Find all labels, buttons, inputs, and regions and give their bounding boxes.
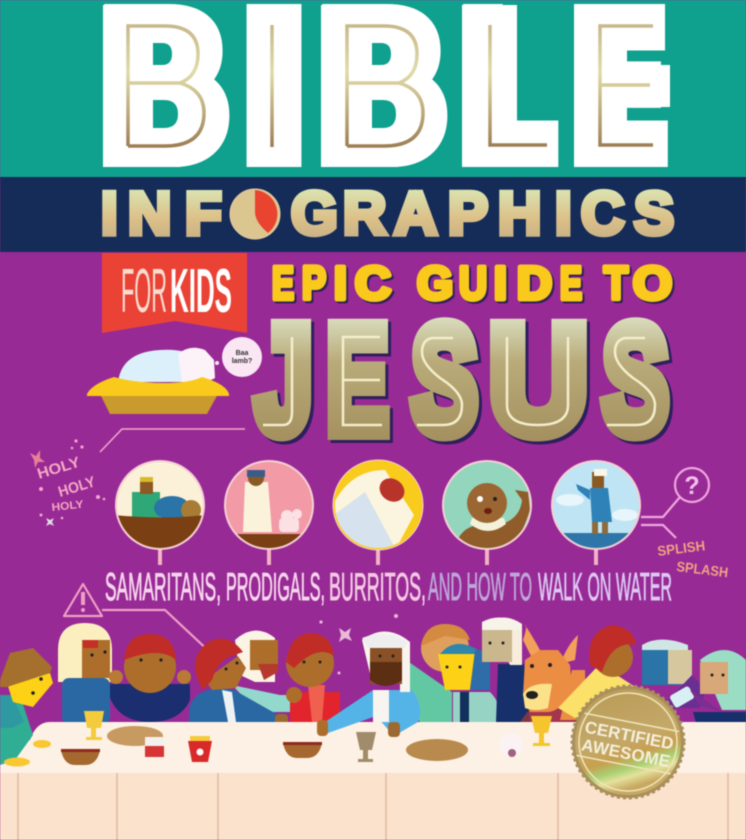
medallion: baby (440, 460, 540, 550)
illustration: last supper figures (58, 617, 746, 758)
text: holy holy holy (35, 454, 98, 514)
medallion: prodigal son (220, 460, 320, 554)
heading: epic guide to: D (517, 257, 552, 309)
heading: JESUS: S (603, 295, 668, 463)
icon: fries (188, 736, 212, 762)
red-haired woman in red (286, 633, 340, 722)
medallion: walk on water (550, 460, 650, 553)
heading: epic guide to: E (272, 257, 294, 309)
text: holy holy holy: HOLY (35, 454, 82, 483)
manger basket (100, 394, 218, 414)
subtitle: samaritans, prodigals, burritos, and how to walk on water (105, 566, 672, 609)
jesus inline strokes (263, 337, 655, 425)
icon: grey goblet (356, 732, 376, 762)
medallion: burrito (333, 460, 423, 560)
heading: epic guide to: E (560, 257, 582, 309)
sparkles (30, 439, 105, 526)
illustration: figures in front of table (0, 631, 420, 766)
heading: epic guide to: G (417, 257, 453, 309)
tablecloth (0, 722, 746, 840)
donkey (523, 625, 586, 720)
man with raised hands (109, 634, 191, 722)
orange-haired disciple (404, 624, 470, 722)
title: BIBLE (103, 0, 665, 198)
icon: white cup (499, 733, 523, 757)
illustration: lamb in manger (87, 337, 262, 414)
text: GRAPHICS (291, 180, 674, 247)
mint disciple with yellow face (438, 644, 500, 747)
title: INFOGRAPHICS: INF (101, 180, 222, 247)
heading: epic guide to (272, 257, 672, 309)
badge: for kids banner: KIDS (170, 257, 232, 326)
subtitle: samaritans, prodigals, burritos, and how to walk on water: BURRITOS, (329, 566, 426, 609)
manger hay (87, 377, 229, 396)
woman in cream veil (58, 623, 112, 724)
text: splish splash (656, 537, 729, 580)
icon: red cup (145, 737, 164, 757)
title counters (153, 43, 396, 128)
icon: question bubble and connectors: ? (684, 472, 700, 500)
text: splish splash: SPLASH (676, 558, 729, 580)
subtitle: samaritans, prodigals, burritos, and how to walk on water: PRODIGALS, (226, 566, 325, 609)
title letter fills (103, 5, 670, 167)
bearded man in white veil (232, 630, 296, 712)
heading: JESUS: U (490, 295, 587, 463)
heading: epic guide to: I (334, 257, 347, 309)
heading: epic guide to: O (633, 257, 672, 309)
badge: for kids banner: FOR (121, 257, 167, 326)
seal: certified awesome: CERTIFIED (583, 718, 675, 754)
icon: bowl left (61, 749, 100, 765)
heading: JESUS: J (256, 295, 312, 463)
text: holy holy holy: HOLY (51, 499, 85, 514)
medallion stems (158, 548, 598, 565)
Jesus (317, 631, 420, 737)
sparkles over disciples (319, 614, 398, 674)
title inline strokes (128, 25, 653, 147)
red-haired man in blue suit (189, 639, 288, 742)
heading: JESUS: S (412, 295, 477, 463)
icon: gold goblet left (84, 711, 104, 740)
background: purple cover (0, 252, 746, 840)
icon: bread right (406, 739, 468, 761)
icon: warning triangle with connector (64, 584, 213, 655)
icon: question bubble and connectors (641, 468, 709, 538)
heading: epic guide to: P (302, 257, 326, 309)
heading: epic guide to: I (494, 257, 507, 309)
seal: certified awesome: AWESOME (580, 735, 672, 771)
subtitle: samaritans, prodigals, burritos, and how to walk on water: SAMARITANS, (105, 566, 221, 609)
speech bubble (215, 337, 262, 377)
icon: pie chart O (230, 189, 280, 239)
blue-veiled figure (642, 640, 706, 709)
icon: gold goblet right (531, 716, 552, 746)
icon: bread left (107, 726, 163, 746)
medallion: good samaritan (110, 460, 210, 550)
heading: epic guide to: C (355, 257, 391, 309)
heading: epic guide to: T (604, 257, 628, 309)
connector: holy to jesus (100, 429, 245, 452)
subtitle: samaritans, prodigals, burritos, and how to walk on water: AND HOW TO (428, 566, 532, 609)
child in front, left (0, 648, 53, 766)
lamb (118, 350, 195, 382)
band: teal header (0, 0, 746, 177)
seal: certified awesome (572, 686, 684, 798)
icon: bowl center (283, 742, 322, 758)
text: splish splash: SPLISH (656, 537, 706, 559)
heading: JESUS: E (327, 295, 388, 463)
disciple in white headdress and navy (482, 617, 530, 722)
red shape behind donkey (520, 668, 586, 722)
band: navy (0, 177, 746, 252)
heading: JESUS (256, 295, 668, 463)
mint-veiled figure in navy (690, 650, 746, 758)
text: holy holy holy: HOLY (56, 473, 98, 501)
table items (61, 711, 552, 765)
speech bubble: Baa (236, 350, 249, 357)
speech bubble: lamb? (232, 358, 252, 365)
heading: epic guide to: U (459, 257, 487, 309)
red-haired woman with yellow robe (558, 625, 640, 720)
